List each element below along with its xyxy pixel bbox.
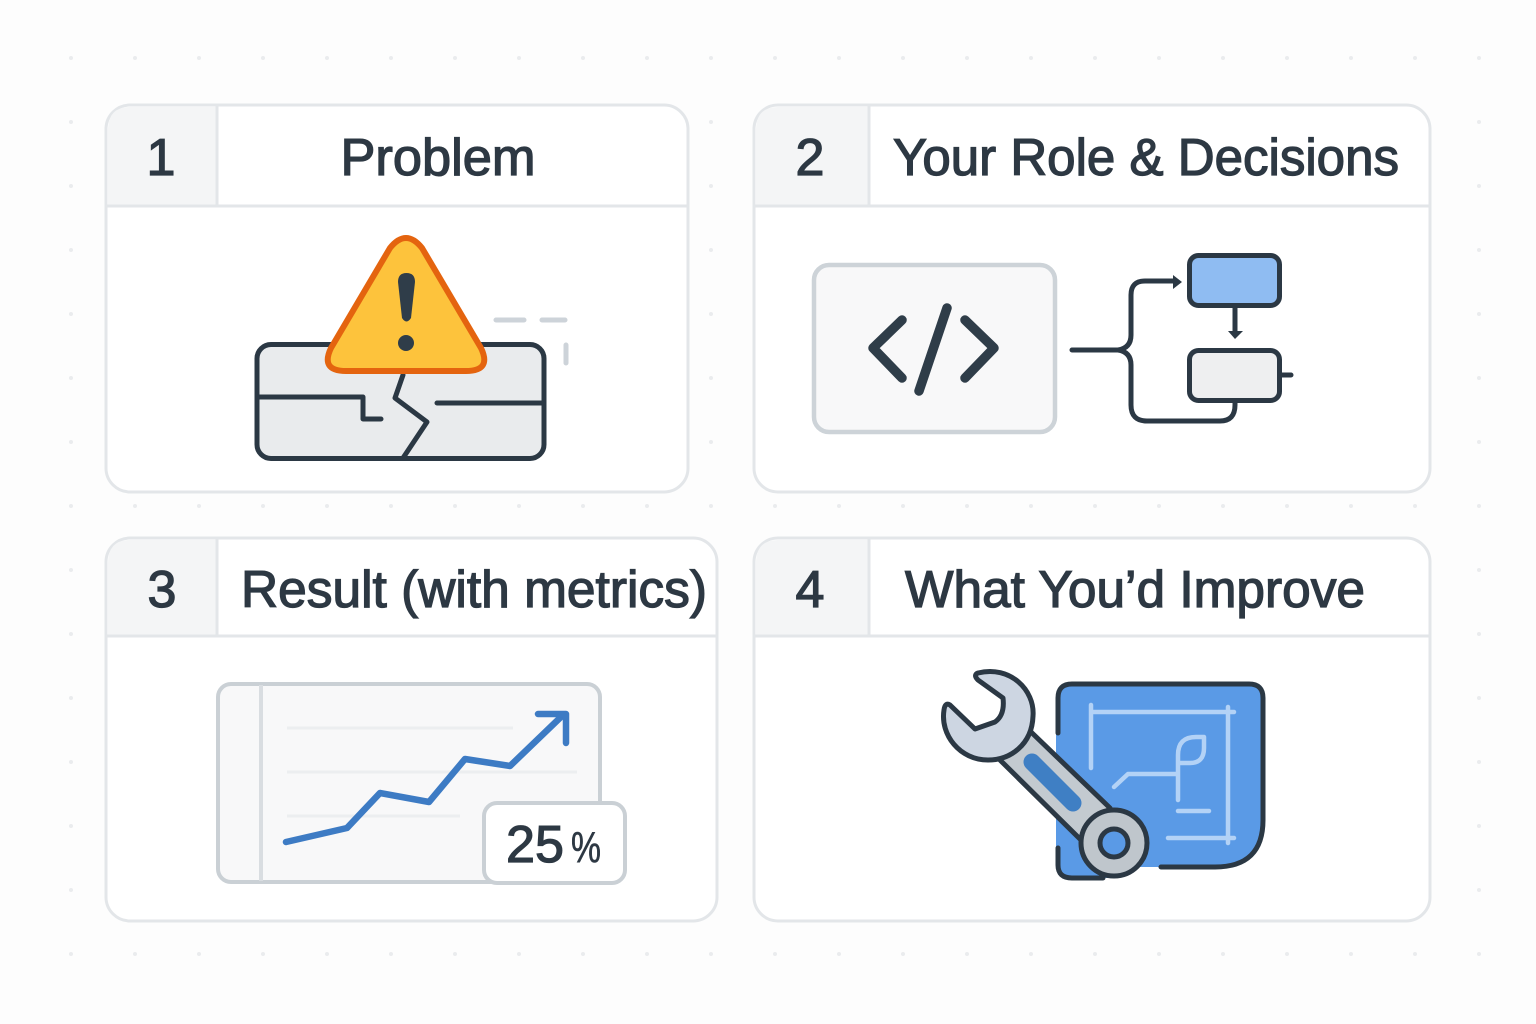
number 4: 4 — [796, 561, 824, 619]
number tab 4 — [756, 540, 868, 635]
metric badge: 25 — [506, 816, 564, 874]
heading: Your Role & Decisions: Your Role & Decisions — [893, 129, 1399, 187]
number 3: 3 — [148, 561, 176, 619]
metric badge: % — [571, 823, 601, 872]
panel: 1 Problem — [106, 105, 688, 492]
number tab 3 — [108, 540, 216, 635]
heading: Problem: Problem — [340, 129, 536, 187]
icon: broken block with warning triangle — [257, 238, 566, 458]
panel: 4 What You'd Improve — [754, 538, 1430, 921]
heading: What You'd Improve: What You’d Improve — [905, 561, 1365, 619]
number tab 1 — [108, 107, 216, 205]
number 2: 2 — [796, 129, 824, 187]
number 1: 1 — [147, 129, 175, 187]
number tab 2 — [756, 107, 868, 205]
icon: blueprint and wrench — [943, 671, 1264, 878]
panel: 2 Your Role & Decisions — [754, 105, 1430, 492]
icon: flow diagram — [1072, 256, 1291, 421]
icon: code window — [814, 265, 1055, 432]
line chart with metric badge — [218, 684, 625, 883]
heading: Result (with metrics): Result (with metrics) — [241, 561, 707, 619]
metric badge — [484, 803, 625, 883]
panel: 3 Result (with metrics) — [106, 538, 717, 921]
